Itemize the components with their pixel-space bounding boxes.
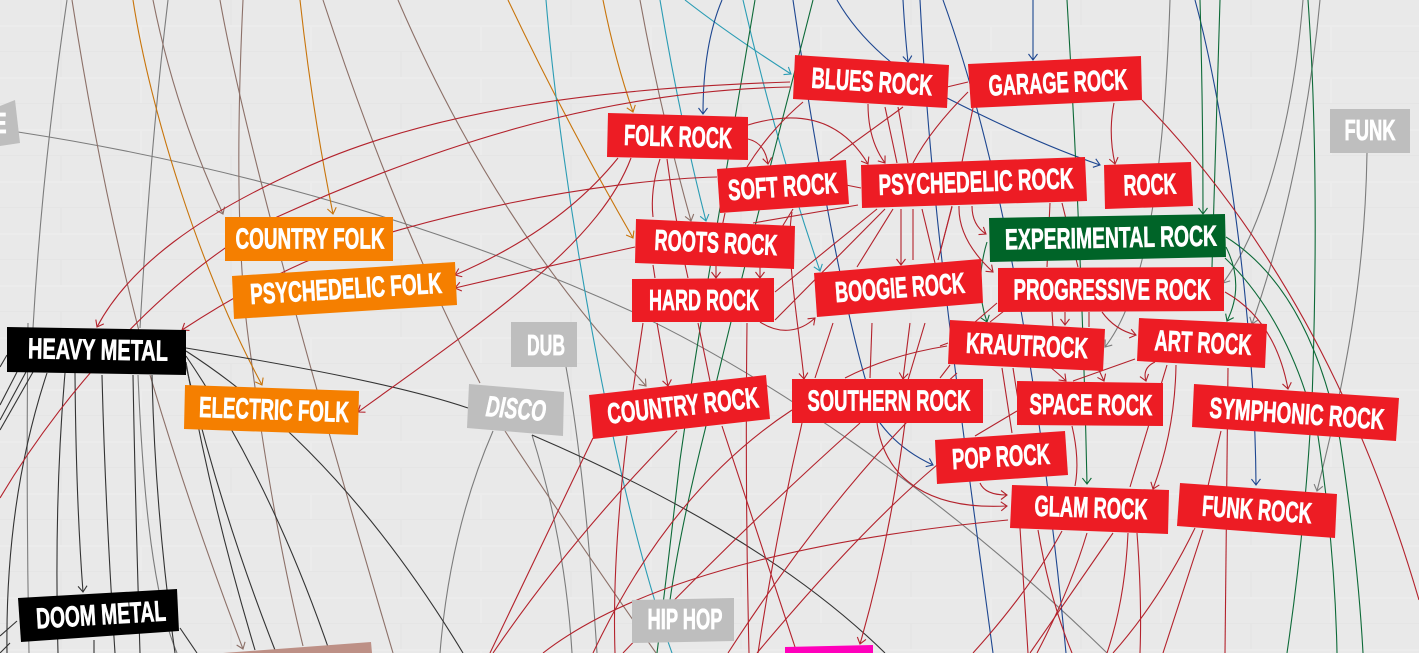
connectors: navy lines [703, 0, 1256, 653]
tag: partly hidden pink genre at the bottom edge [785, 645, 873, 653]
connectors: teal lines [546, 0, 820, 653]
tag: Rock [1104, 162, 1193, 209]
tag: Glam Rock [1010, 485, 1169, 534]
tag: Hip Hop: HIP HOP [648, 604, 722, 636]
tag: Folk Rock: FOLK ROCK [624, 120, 732, 155]
tag: Funk Rock: FUNK ROCK [1201, 491, 1313, 530]
connectors: brown lines [72, 0, 691, 653]
tag: Krautrock: KRAUTROCK [965, 328, 1089, 365]
tag: partly hidden gray genre at the left edge [0, 100, 20, 146]
tag: Psychedelic Folk: PSYCHEDELIC FOLK [249, 268, 443, 311]
tag: Southern Rock: SOUTHERN ROCK [808, 386, 971, 418]
tag: Psychedelic Folk [232, 262, 457, 319]
tag: partly hidden mauve genre at the bottom edge [223, 642, 372, 653]
tag: Disco [467, 384, 564, 436]
tag: Boogie Rock [814, 259, 983, 317]
connectors: orange lines [133, 0, 633, 385]
tag: Experimental Rock [989, 214, 1226, 262]
tag: Garage Rock: GARAGE ROCK [988, 64, 1128, 103]
tag: Pop Rock: POP ROCK [951, 439, 1051, 476]
tag: Hard Rock: HARD ROCK [649, 285, 759, 317]
tag: Electric Folk: ELECTRIC FOLK [198, 392, 350, 429]
tag: Psychedelic Rock [861, 157, 1087, 208]
tag: Pop Rock [935, 431, 1068, 484]
tag: Country Folk [225, 217, 393, 261]
tag: Funk [1330, 109, 1410, 153]
tag: Country Folk: COUNTRY FOLK [236, 224, 385, 256]
connectors: black lines from heavy metal [0, 348, 885, 653]
tag: Experimental Rock: EXPERIMENTAL ROCK [1005, 221, 1217, 256]
tag: Soft Rock: SOFT ROCK [727, 168, 839, 207]
tag: Glam Rock: GLAM ROCK [1034, 491, 1148, 526]
tag: Rock: ROCK [1123, 169, 1177, 202]
tag: Psychedelic Rock: PSYCHEDELIC ROCK [878, 163, 1074, 202]
tag: Disco: DISCO [485, 391, 548, 428]
tag: Roots Rock [635, 219, 795, 269]
tag: Dub: DUB [527, 330, 565, 362]
tag: Funk Rock [1177, 483, 1337, 538]
tag: Space Rock [1017, 381, 1163, 426]
tag: Dub [511, 322, 577, 367]
tag: Boogie Rock: BOOGIE ROCK [834, 268, 966, 309]
tag: Progressive Rock: PROGRESSIVE ROCK [1014, 274, 1211, 306]
tag: Country Rock [589, 375, 770, 439]
tag: Heavy Metal [7, 327, 186, 375]
connectors: green lines [657, 0, 1363, 653]
tag: Art Rock [1137, 318, 1267, 368]
tag: Progressive Rock [998, 267, 1224, 312]
tag: Country Rock: COUNTRY ROCK [606, 382, 760, 431]
tag: Roots Rock: ROOTS ROCK [654, 225, 778, 262]
tag: Heavy Metal: HEAVY METAL [28, 333, 168, 368]
tag: Folk Rock [607, 113, 748, 160]
tag: Hard Rock [632, 278, 774, 322]
tag: Krautrock [948, 320, 1105, 371]
tag: Art Rock: ART ROCK [1154, 325, 1252, 362]
tag: Space Rock: SPACE ROCK [1029, 389, 1153, 422]
tag: Doom Metal [18, 589, 179, 642]
tag: Garage Rock [968, 56, 1142, 108]
tag: Hip Hop [632, 598, 734, 643]
tag: Blues Rock: BLUES ROCK [811, 63, 933, 102]
tag: Soft Rock [717, 160, 849, 213]
tag: Southern Rock [792, 379, 983, 423]
tag: Blues Rock [793, 55, 949, 108]
tag: Electric Folk [184, 385, 359, 435]
tag: Doom Metal: DOOM METAL [35, 596, 167, 635]
